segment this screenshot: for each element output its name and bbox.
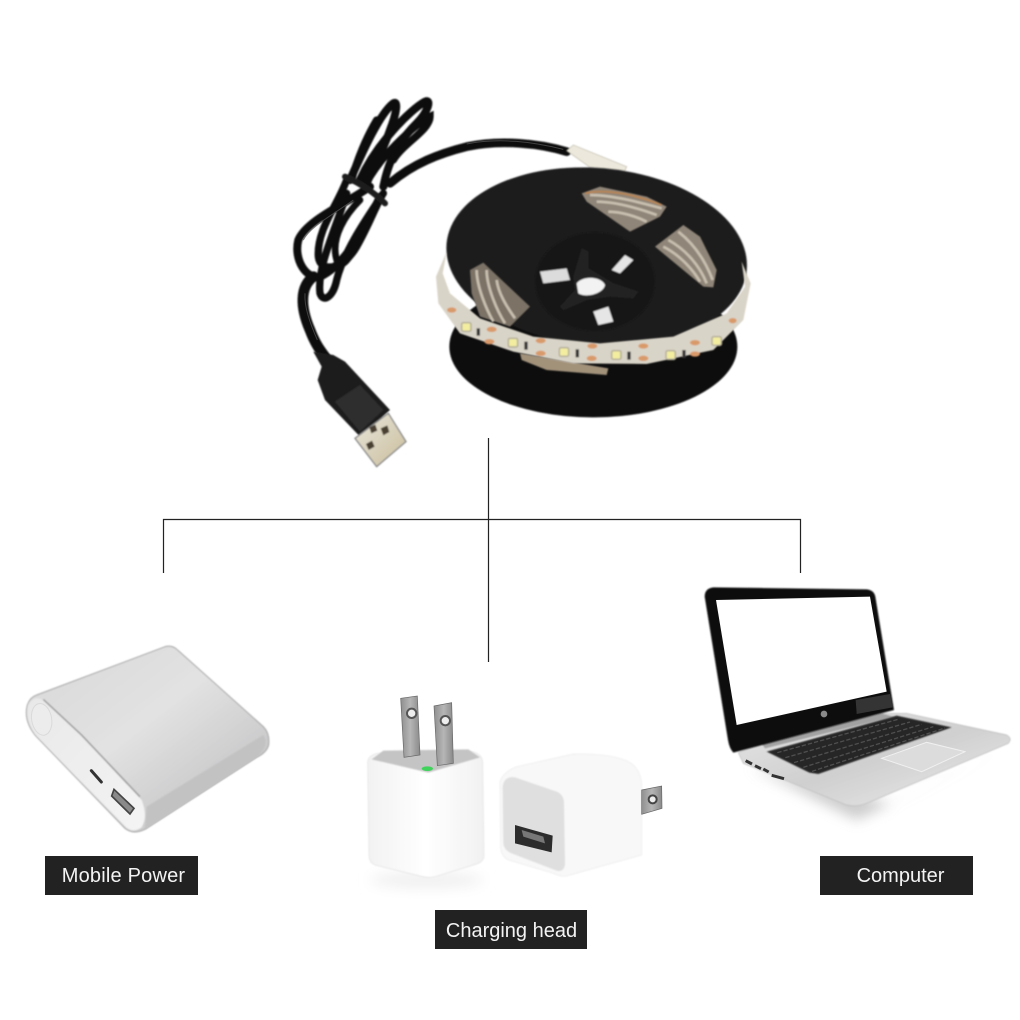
label: Computer — [820, 856, 973, 895]
laptop screen — [716, 597, 887, 725]
hinge strip — [762, 713, 893, 748]
label: Charging head: Charging head — [446, 920, 577, 942]
product photo: charging head adapters — [368, 696, 662, 888]
side prong — [642, 786, 662, 814]
right adapter grey face — [503, 777, 565, 871]
lower reel plate — [449, 276, 737, 417]
connector tree lines — [164, 438, 800, 662]
laptop lid — [705, 587, 894, 753]
reel hub with cutouts — [535, 232, 655, 331]
power bank lower edge shading — [145, 735, 266, 829]
bezel gloss panel — [856, 694, 893, 714]
left adapter floor shadow — [370, 872, 483, 888]
HP logo — [821, 711, 827, 717]
keyboard — [767, 716, 952, 774]
power button — [29, 702, 54, 737]
reel windows showing strip — [470, 187, 717, 327]
white cable sleeve — [567, 145, 627, 171]
label: Charging head — [435, 910, 587, 949]
USB-A port — [112, 789, 134, 814]
product photo: mobile power bank — [26, 646, 269, 832]
label: Mobile Power: Mobile Power — [62, 865, 185, 887]
left adapter body — [368, 752, 484, 877]
rear prong — [434, 703, 453, 766]
upper reel plate — [439, 155, 754, 358]
product photo: USB LED strip reel with cable — [297, 101, 754, 467]
strip underside section — [520, 353, 608, 375]
green LED — [422, 766, 433, 771]
micro USB port — [91, 771, 101, 782]
side ports — [746, 761, 784, 779]
label: Computer: Computer — [857, 865, 944, 887]
front prong — [401, 696, 420, 757]
LED strip band — [436, 252, 751, 364]
trackpad — [882, 742, 965, 772]
power bank body — [26, 646, 269, 832]
laptop shadow — [750, 747, 1010, 820]
USB plug — [313, 352, 406, 467]
label: Mobile Power — [45, 856, 198, 895]
laptop base — [738, 713, 1010, 806]
power bank end face — [28, 698, 145, 830]
USB port — [515, 825, 553, 852]
cable highlights — [303, 141, 563, 340]
face edge line — [43, 699, 140, 797]
cable coil — [297, 101, 567, 357]
product photo: laptop computer — [705, 587, 1010, 820]
right adapter body — [500, 754, 642, 876]
left adapter top face — [372, 749, 480, 773]
